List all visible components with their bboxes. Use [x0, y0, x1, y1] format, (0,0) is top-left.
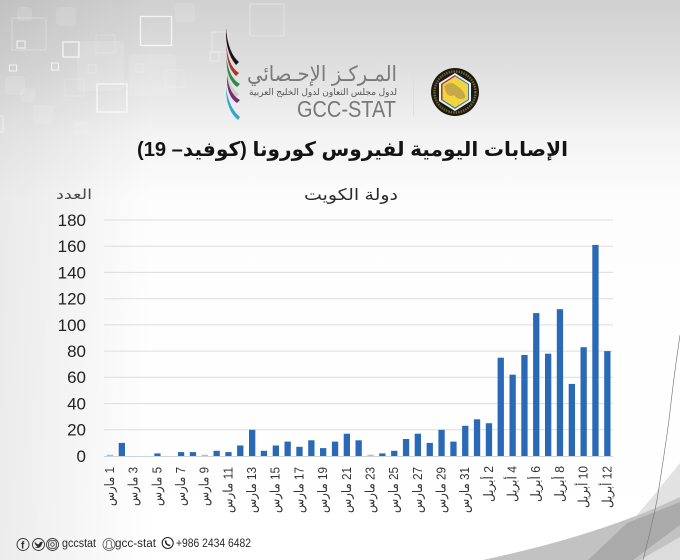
logo Arabic name: المـركـز الإحـصائي [247, 63, 397, 86]
icon: whatsapp [162, 538, 173, 548]
x axis date labels: 13 مارس [244, 467, 260, 513]
y axis labels: 60 [67, 368, 86, 387]
x axis date labels: 6 أبريل [527, 466, 544, 502]
y axis labels: 20 [67, 420, 86, 440]
x axis date labels: 27 مارس [410, 467, 426, 513]
y axis labels: 0 [77, 447, 86, 466]
x axis date labels: 11 مارس [220, 467, 236, 513]
x axis date labels: 21 مارس [339, 467, 355, 513]
icon: twitter [32, 538, 44, 550]
y axis labels: 80 [67, 342, 86, 361]
x axis date labels: 10 أبريل [575, 466, 592, 508]
x axis date labels: 12 أبريل [598, 466, 615, 508]
bottom right swoosh [483, 335, 680, 560]
y axis labels: 180 [58, 211, 86, 230]
icon: snapchat [103, 538, 115, 550]
x axis date labels: 9 مارس [197, 467, 213, 506]
x axis date labels: 5 مارس [149, 467, 165, 506]
bar chart: daily cases [58, 211, 615, 513]
y axis title: العدد [56, 186, 92, 202]
y axis labels: 40 [67, 394, 86, 414]
footer social contacts [17, 538, 251, 552]
x axis date labels: 25 مارس [386, 467, 402, 513]
gcc-stat handle: gcc-stat [115, 538, 157, 550]
logo: GCC-STAT [226, 28, 479, 122]
x axis date labels: 4 أبريل [504, 466, 520, 502]
x axis date labels: 23 مارس [362, 467, 378, 513]
logo wordmark: GCC-STAT [297, 96, 396, 122]
logo ribbon [226, 28, 240, 120]
y axis labels: 160 [58, 237, 86, 256]
x axis date labels: 31 مارس [457, 467, 473, 513]
y axis labels [58, 211, 86, 466]
chart subtitle: دولة الكويت [304, 187, 398, 205]
logo Arabic subtitle: لدول مجلس التعاون لدول الخليج العربية [249, 87, 397, 97]
y axis labels: 100 [58, 316, 86, 335]
icon: instagram [46, 538, 58, 550]
icon: facebook [17, 538, 29, 552]
x axis date labels [102, 466, 615, 513]
title: الإصابات اليومية لفيروس كورونا (كوفيد– 19) [137, 139, 568, 161]
x axis date labels: 15 مارس [268, 467, 284, 513]
y axis labels: 120 [58, 290, 86, 308]
x axis date labels: 17 مارس [291, 467, 307, 513]
x axis date labels: 2 أبريل [480, 466, 497, 502]
bars [107, 245, 611, 456]
x axis date labels: 29 مارس [434, 467, 450, 513]
gccstat handle: gccstat [62, 538, 97, 550]
logo divider [413, 68, 414, 116]
icon: GCC emblem [431, 68, 479, 116]
x axis date labels: 7 مارس [173, 467, 189, 506]
decorative squares background [0, 3, 284, 135]
phone number: +986 2434 6482 [176, 538, 251, 550]
x axis date labels: 19 مارس [315, 467, 331, 513]
y axis labels: 140 [58, 264, 86, 282]
x axis date labels: 3 مارس [126, 467, 142, 506]
icon: facebook: f [21, 540, 25, 552]
x axis date labels: 8 أبريل [551, 466, 568, 502]
x axis date labels: 1 مارس [102, 467, 118, 506]
